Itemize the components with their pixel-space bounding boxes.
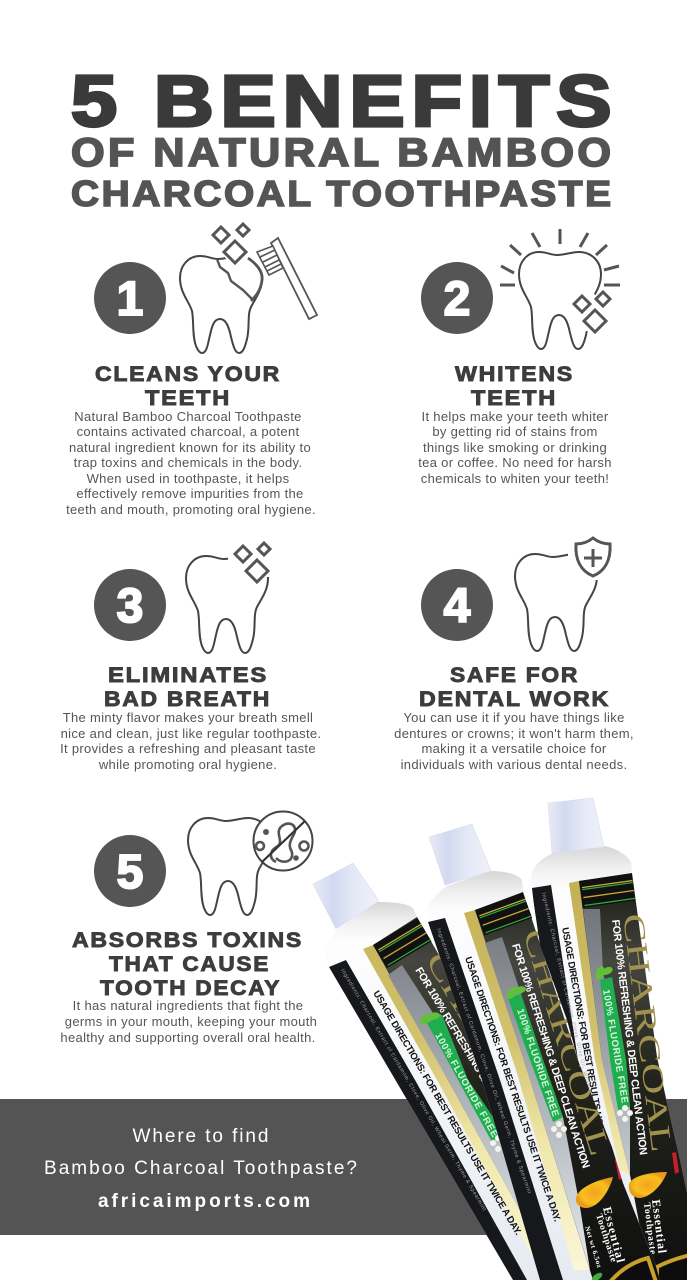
heading: DENTAL WORK — [419, 687, 610, 711]
benefit 4: safe for dental work — [394, 538, 634, 772]
body text — [60, 998, 317, 1045]
toothpaste tube 2: Ingredients: Charcoal, Extract of Cardamom, Clove, Olive Oil, Wheat Germ, Thyme & Spearmint — [435, 928, 532, 1195]
number badge 3 — [94, 569, 166, 641]
cap — [313, 863, 379, 929]
toothpaste tube 2: Toothpaste — [593, 1213, 618, 1263]
toothpaste tube 3 — [531, 798, 687, 1280]
body text: individuals with various dental needs. — [401, 757, 627, 772]
toothpaste tube 2: Essential — [600, 1205, 628, 1265]
call to action text: Bamboo Charcoal Toothpaste? — [44, 1158, 357, 1179]
toothpaste tube 2: Net wt 6.5oz — [583, 1225, 603, 1269]
oil drop — [629, 1172, 667, 1198]
body text: The minty flavor makes your breath smell — [63, 710, 313, 725]
body text: It has natural ingredients that fight the — [73, 998, 303, 1013]
flower — [490, 1135, 506, 1152]
body text: It provides a refreshing and pleasant taste — [60, 741, 316, 756]
heading: ABSORBS TOXINS — [72, 928, 303, 952]
number badge 2 — [421, 262, 493, 334]
number badge 1 — [94, 262, 166, 334]
toothpaste tube 3: CHARCOAL — [616, 912, 678, 1154]
toothpaste tube 3: Essential — [649, 1199, 670, 1255]
body text: It helps make your teeth whiter — [422, 409, 609, 424]
toothpaste tube 2 — [426, 824, 660, 1280]
heading: CLEANS YOUR — [95, 362, 281, 386]
toothpaste tube 1: USAGE DIRECTIONS: FOR BEST RESULTS USE IT TWICE A DAY. — [370, 989, 523, 1237]
footer banner — [0, 1099, 687, 1235]
gold seal — [610, 1258, 656, 1280]
body text: chemicals to whiten your teeth! — [421, 471, 609, 486]
heading: TEETH — [145, 386, 231, 410]
oil drop — [576, 1177, 613, 1208]
body text: while promoting oral hygiene. — [98, 757, 277, 772]
heading — [95, 362, 281, 410]
toothpaste tube 3: FOR 100% REFRESHING & DEEP CLEAN ACTION — [609, 919, 649, 1156]
toothpaste tube 2: 100% FLUORIDE FREE — [514, 1007, 561, 1119]
benefit 1: cleans your teeth — [66, 224, 317, 517]
heading — [455, 362, 574, 410]
body text: You can use it if you have things like — [403, 710, 625, 725]
heading: SAFE FOR — [450, 663, 579, 687]
number badge 1: 1 — [117, 273, 143, 326]
call to action text: Where to find — [132, 1126, 268, 1147]
toothpaste tube 3: Toothpaste — [641, 1202, 657, 1255]
body text — [60, 710, 321, 772]
body text: nice and clean, just like regular toothpaste. — [61, 726, 321, 741]
body text: tea or coffee. No need for harsh — [418, 455, 612, 470]
toothpaste tube 3: 100% FLUORIDE FREE — [600, 989, 630, 1105]
call to action text — [44, 1126, 357, 1212]
toothpaste tube 3: USAGE DIRECTIONS: FOR BEST RESULTS USE IT TWICE A DAY. — [559, 927, 618, 1202]
heading: THAT CAUSE — [109, 952, 270, 976]
number badge 5: 5 — [117, 846, 143, 899]
heading: TOOTH DECAY — [100, 976, 281, 1000]
icon: tooth with crossed-out germs — [188, 812, 312, 915]
toothpaste tube 2: USAGE DIRECTIONS: FOR BEST RESULTS USE IT TWICE A DAY. — [462, 955, 562, 1223]
heading: BAD BREATH — [104, 687, 271, 711]
heading: ELIMINATES — [108, 663, 268, 687]
title — [71, 62, 612, 214]
title: OF NATURAL BAMBOO — [71, 129, 611, 175]
toothpaste tube 1: 100% FLUORIDE FREE — [432, 1031, 500, 1140]
body text: germs in your mouth, keeping your mouth — [65, 1014, 317, 1029]
flower — [617, 1105, 633, 1122]
body text: dentures or crowns; it won't harm them, — [394, 726, 634, 741]
body text: natural ingredient known for its ability to — [69, 440, 311, 455]
title: CHARCOAL TOOTHPASTE — [71, 173, 611, 214]
gold seal — [657, 1255, 687, 1280]
flower — [551, 1121, 567, 1138]
heading: WHITENS — [455, 362, 574, 386]
toothpaste tube 2: CHARCOAL — [516, 925, 617, 1160]
number badge 5 — [94, 835, 166, 907]
body text: When used in toothpaste, it helps — [87, 471, 290, 486]
toothpaste tube 1: CHARCOAL — [419, 947, 573, 1174]
body text: Natural Bamboo Charcoal Toothpaste — [74, 409, 302, 424]
body text: making it a versatile choice for — [421, 741, 607, 756]
toothpaste tube 1: FOR 100% REFRESHING & DEEP CLEAN ACTION — [412, 965, 546, 1177]
body text: healthy and supporting overall oral health. — [60, 1030, 316, 1045]
body text: contains activated charcoal, a potent — [77, 424, 299, 439]
heading — [72, 928, 303, 1000]
call to action text: africaimports.com — [98, 1191, 310, 1212]
number badge 4: 4 — [444, 580, 471, 633]
number badge 3: 3 — [117, 580, 143, 633]
benefit 3: eliminates bad breath — [60, 543, 321, 772]
icon: tooth with shield — [515, 538, 612, 651]
body text — [394, 710, 634, 772]
number badge 4 — [421, 569, 493, 641]
cap — [429, 824, 491, 885]
heading — [104, 663, 271, 711]
number badge 2: 2 — [444, 273, 470, 326]
body text — [66, 409, 316, 517]
icon: tooth with toothbrush — [180, 224, 317, 353]
cap — [548, 798, 604, 853]
toothpaste tube 3: Ingredients: Charcoal, Extract of Cardamom, Clove, Olive Oil, Wheat Germ, Thyme & Spearmint — [540, 892, 609, 1167]
heading — [419, 663, 610, 711]
title: 5 BENEFITS — [71, 62, 611, 142]
body text: things like smoking or drinking — [423, 440, 607, 455]
toothpaste tube 2: FOR 100% REFRESHING & DEEP CLEAN ACTION — [509, 942, 592, 1170]
toothpaste tube 1: Ingredients: Charcoal, Extract of Cardamom, Clove, Olive Oil, Wheat Germ, Thyme & Spearmint — [339, 968, 487, 1212]
body text: by getting rid of stains from — [432, 424, 598, 439]
heading: TEETH — [471, 386, 557, 410]
body text: effectively remove impurities from the — [76, 486, 304, 501]
body text: trap toxins and chemicals in the body. — [74, 455, 302, 470]
benefit 2: whitens teeth — [418, 229, 620, 486]
icon: tooth with sparkles — [186, 543, 272, 653]
body text — [418, 409, 612, 486]
benefit 5: absorbs toxins — [60, 812, 317, 1045]
icon: shining tooth — [500, 229, 620, 349]
toothpaste tube 1 — [313, 863, 573, 1280]
body text: teeth and mouth, promoting oral hygiene. — [66, 502, 316, 517]
